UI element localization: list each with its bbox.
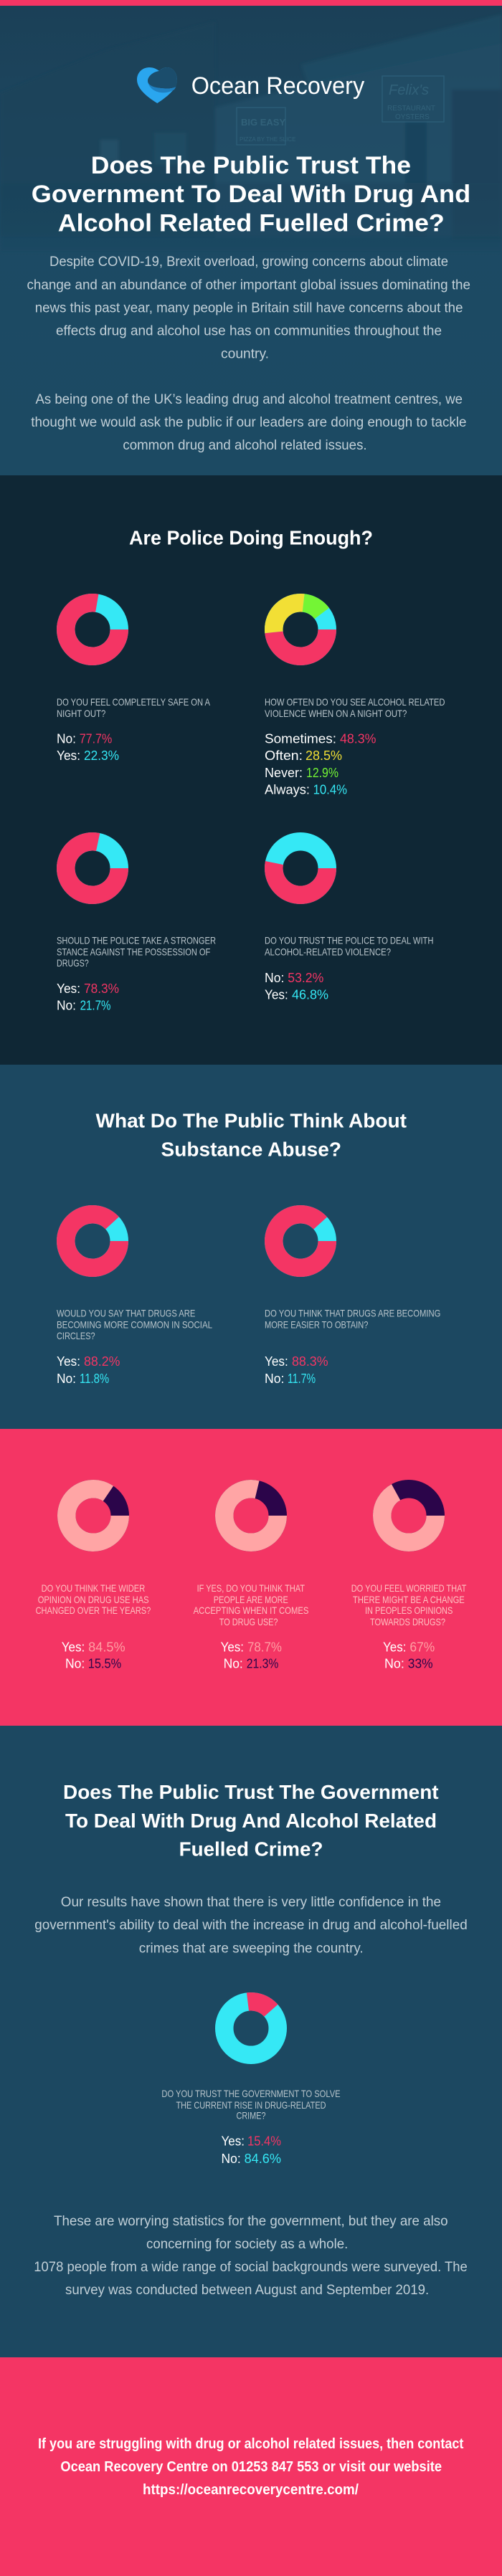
answers: alcohol violence frequency: 10.4% <box>313 783 347 797</box>
answers: alcohol violence frequency: 48.3% <box>340 732 376 746</box>
question: more accepting of drug use: IF YES, DO YOU THINK THAT <box>197 1582 305 1594</box>
icon: wave heart <box>137 67 177 103</box>
question: drugs in social circles: WOULD YOU SAY THAT DRUGS ARE <box>57 1308 195 1319</box>
donut chart: alcohol violence frequency <box>274 603 327 656</box>
closing paragraph: survey was conducted between August and September 2019. <box>65 2282 429 2298</box>
closing paragraph: concerning for society as a whole. <box>146 2236 348 2252</box>
panel: substance abuse <box>0 1065 502 1429</box>
answers: drugs in social circles: 11.8% <box>80 1372 109 1386</box>
answers: stance on possession: Yes: <box>57 982 80 996</box>
question: drugs easier to obtain <box>265 1308 440 1331</box>
closing paragraph: These are worrying statistics for the government, but they are also <box>54 2213 448 2229</box>
answers: more accepting of drug use: 78.7% <box>247 1640 282 1654</box>
contact message <box>38 2436 464 2498</box>
answers: feeling safe: Yes: <box>57 748 80 763</box>
question: trust in government: DO YOU TRUST THE GOVERNMENT TO SOLVE <box>161 2088 341 2099</box>
answers: drugs easier to obtain <box>265 1354 328 1386</box>
panel: call to action <box>0 2357 502 2576</box>
answers: stance on possession: 21.7% <box>80 999 110 1013</box>
donut chart: worried about opinion change <box>382 1489 435 1542</box>
donut chart: wider opinion changed <box>67 1489 120 1542</box>
question: drugs in social circles: CIRCLES? <box>57 1330 95 1341</box>
question: trust in police <box>265 935 433 958</box>
answers: worried about opinion change <box>383 1640 435 1671</box>
answers: trust in government: No: <box>221 2152 241 2166</box>
answers: alcohol violence frequency <box>265 732 376 797</box>
question: trust in government: THE CURRENT RISE IN DRUG-RELATED <box>176 2099 326 2111</box>
logo <box>137 67 364 103</box>
donut chart: trust in police <box>274 842 327 895</box>
answers: trust in police: 46.8% <box>292 987 328 1002</box>
answers: feeling safe: No: <box>57 732 76 746</box>
background street photo: OYSTERS <box>395 113 430 121</box>
answers: drugs easier to obtain: No: <box>265 1372 284 1386</box>
question: drugs easier to obtain: MORE EASIER TO OBTAIN? <box>265 1319 369 1331</box>
answers: more accepting of drug use: Yes: <box>221 1640 244 1654</box>
answers: trust in government: 15.4% <box>247 2134 281 2148</box>
question: feeling safe <box>57 696 211 719</box>
answers: feeling safe: 77.7% <box>80 732 112 746</box>
answers: more accepting of drug use: 21.3% <box>247 1657 278 1671</box>
results paragraph: Our results have shown that there is very little confidence in the <box>61 1894 441 1910</box>
intro paragraph: change and an abundance of other important global issues dominating the <box>27 277 470 293</box>
donut chart: more accepting of drug use <box>224 1489 278 1542</box>
question: trust in police: ALCOHOL-RELATED VIOLENCE? <box>265 946 391 958</box>
closing paragraph <box>34 2213 468 2298</box>
background street photo: PIZZA BY THE SLICE <box>240 136 295 143</box>
answers: worried about opinion change: 67% <box>409 1640 435 1654</box>
question: wider opinion changed: DO YOU THINK THE WIDER <box>42 1582 145 1594</box>
top accent bar <box>0 0 502 6</box>
answers: wider opinion changed: 15.5% <box>88 1657 121 1671</box>
contact message: Ocean Recovery Centre on 01253 847 553 or visit our website <box>60 2459 442 2475</box>
question: feeling safe: DO YOU FEEL COMPLETELY SAFE ON A <box>57 696 211 708</box>
question: stance on possession: STANCE AGAINST THE POSSESSION OF <box>57 946 210 958</box>
answers: worried about opinion change: 33% <box>408 1657 433 1671</box>
question: worried about opinion change <box>351 1582 467 1627</box>
heading: government trust <box>63 1781 439 1860</box>
donut chart: drugs in social circles <box>66 1215 119 1268</box>
background street photo: RESTAURANT <box>387 105 435 113</box>
heading: substance abuse: Substance Abuse? <box>161 1138 341 1160</box>
background street photo: Felix's <box>389 82 429 98</box>
card: wider opinion changed <box>36 1489 151 1671</box>
logo: Ocean Recovery <box>191 72 364 100</box>
results paragraph: government's ability to deal with the increase in drug and alcohol-fuelled <box>34 1917 468 1933</box>
answers: stance on possession: 78.3% <box>84 982 119 996</box>
answers: drugs easier to obtain: Yes: <box>265 1354 288 1369</box>
heading: government trust: Does The Public Trust The Government <box>63 1781 439 1803</box>
question: more accepting of drug use: TO DRUG USE? <box>219 1616 278 1627</box>
question: trust in government <box>161 2088 341 2121</box>
answers: trust in government <box>221 2134 281 2166</box>
answers: trust in police: Yes: <box>265 987 288 1002</box>
heading: substance abuse <box>96 1109 407 1160</box>
donut chart: trust in government <box>221 1998 281 2058</box>
answers: alcohol violence frequency: Never: <box>265 766 303 780</box>
answers: drugs easier to obtain: 11.7% <box>288 1372 316 1386</box>
question: trust in police: DO YOU TRUST THE POLICE TO DEAL WITH <box>265 935 433 946</box>
second intro paragraph <box>31 391 466 453</box>
title: Government To Deal With Drug And <box>32 181 470 208</box>
answers: wider opinion changed <box>62 1640 126 1671</box>
answers: drugs in social circles: 88.2% <box>84 1354 120 1369</box>
background street photo: BIG EASY <box>241 117 285 128</box>
question: worried about opinion change: THERE MIGHT BE A CHANGE <box>353 1594 465 1605</box>
panel: header <box>0 6 502 475</box>
answers: drugs in social circles: No: <box>57 1372 76 1386</box>
contact message: https://oceanrecoverycentre.com/ <box>143 2482 359 2498</box>
heading: government trust: Fuelled Crime? <box>179 1838 323 1860</box>
card: alcohol violence frequency <box>265 603 445 797</box>
contact message: If you are struggling with drug or alcohol related issues, then contact <box>38 2436 464 2452</box>
question: drugs in social circles: BECOMING MORE COMMON IN SOCIAL <box>57 1319 212 1331</box>
intro paragraph <box>27 254 470 362</box>
question: alcohol violence frequency: VIOLENCE WHEN ON A NIGHT OUT? <box>265 708 407 719</box>
answers: alcohol violence frequency: Always: <box>265 783 310 797</box>
card: trust in police <box>265 842 433 1002</box>
answers: more accepting of drug use <box>221 1640 282 1671</box>
question: more accepting of drug use: ACCEPTING WHEN IT COMES <box>194 1605 308 1616</box>
answers: drugs in social circles <box>57 1354 120 1386</box>
answers: wider opinion changed: 84.5% <box>88 1640 126 1654</box>
intro paragraph: news this past year, many people in Britain still have concerns about the <box>35 300 463 315</box>
answers: stance on possession <box>57 982 119 1013</box>
closing paragraph: 1078 people from a wide range of social backgrounds were surveyed. The <box>34 2259 468 2275</box>
title <box>32 152 470 237</box>
intro paragraph: effects drug and alcohol use has on communities throughout the <box>56 323 442 338</box>
second intro paragraph: thought we would ask the public if our leaders are doing enough to tackle <box>31 414 466 430</box>
second intro paragraph: common drug and alcohol related issues. <box>123 437 367 453</box>
answers: wider opinion changed: No: <box>65 1657 85 1671</box>
answers: worried about opinion change: Yes: <box>383 1640 406 1654</box>
card: feeling safe <box>57 603 211 763</box>
question: more accepting of drug use: PEOPLE ARE MORE <box>214 1594 288 1605</box>
heading: substance abuse: What Do The Public Think About <box>96 1109 407 1131</box>
intro paragraph: country. <box>221 346 269 362</box>
answers: trust in police: No: <box>265 971 284 985</box>
question: worried about opinion change: TOWARDS DRUGS? <box>370 1616 445 1627</box>
heading: government trust: To Deal With Drug And Alcohol Related <box>65 1810 437 1832</box>
answers: alcohol violence frequency: Sometimes: <box>265 732 336 746</box>
question: more accepting of drug use <box>194 1582 308 1627</box>
results paragraph: crimes that are sweeping the country. <box>139 1940 364 1956</box>
results paragraph <box>34 1894 468 1956</box>
answers: alcohol violence frequency: 28.5% <box>306 748 342 763</box>
answers: trust in government: Yes: <box>221 2134 245 2148</box>
card: more accepting of drug use <box>194 1489 308 1671</box>
donut chart: feeling safe <box>66 603 119 656</box>
answers: trust in government: 84.6% <box>245 2152 281 2166</box>
title: Alcohol Related Fuelled Crime? <box>58 209 445 237</box>
answers: drugs in social circles: Yes: <box>57 1354 80 1369</box>
question: alcohol violence frequency <box>265 696 445 719</box>
question: drugs easier to obtain: DO YOU THINK THAT DRUGS ARE BECOMING <box>265 1308 440 1319</box>
question: feeling safe: NIGHT OUT? <box>57 708 105 719</box>
question: worried about opinion change: DO YOU FEEL WORRIED THAT <box>351 1582 467 1594</box>
question: stance on possession: DRUGS? <box>57 957 89 969</box>
answers: trust in police: 53.2% <box>288 971 323 985</box>
donut chart: stance on possession <box>66 842 119 895</box>
question: trust in government: CRIME? <box>237 2110 266 2121</box>
background street photo <box>0 14 502 330</box>
card: stance on possession <box>57 842 216 1013</box>
question: wider opinion changed: OPINION ON DRUG USE HAS <box>38 1594 149 1605</box>
answers: feeling safe <box>57 732 119 763</box>
heading: are police doing enough: Are Police Doing Enough? <box>129 526 373 548</box>
question: stance on possession: SHOULD THE POLICE TAKE A STRONGER <box>57 935 216 946</box>
answers: alcohol violence frequency: Often: <box>265 748 303 763</box>
title: Does The Public Trust The <box>91 152 411 179</box>
card: drugs in social circles <box>57 1215 212 1386</box>
panel: are police doing enough <box>0 475 502 1065</box>
question: drugs in social circles <box>57 1308 212 1341</box>
card: trust in government <box>161 1998 341 2166</box>
question: wider opinion changed: CHANGED OVER THE YEARS? <box>36 1605 151 1616</box>
answers: stance on possession: No: <box>57 999 76 1013</box>
panel: government trust <box>0 1726 502 2357</box>
question: wider opinion changed <box>36 1582 151 1616</box>
answers: more accepting of drug use: No: <box>224 1657 243 1671</box>
answers: drugs easier to obtain: 88.3% <box>292 1354 328 1369</box>
second intro paragraph: As being one of the UK’s leading drug and alcohol treatment centres, we <box>36 391 463 407</box>
panel: public opinion <box>0 1429 502 1726</box>
question: stance on possession <box>57 935 216 969</box>
answers: feeling safe: 22.3% <box>84 748 119 763</box>
answers: trust in police <box>265 971 328 1002</box>
card: drugs easier to obtain <box>265 1215 440 1386</box>
card: worried about opinion change <box>351 1489 467 1671</box>
intro paragraph: Despite COVID-19, Brexit overload, growing concerns about climate <box>49 254 448 270</box>
question: alcohol violence frequency: HOW OFTEN DO YOU SEE ALCOHOL RELATED <box>265 696 445 708</box>
answers: worried about opinion change: No: <box>384 1657 404 1671</box>
answers: wider opinion changed: Yes: <box>62 1640 85 1654</box>
question: worried about opinion change: IN PEOPLES OPINIONS <box>365 1605 453 1616</box>
donut chart: drugs easier to obtain <box>274 1215 327 1268</box>
answers: alcohol violence frequency: 12.9% <box>306 766 338 780</box>
